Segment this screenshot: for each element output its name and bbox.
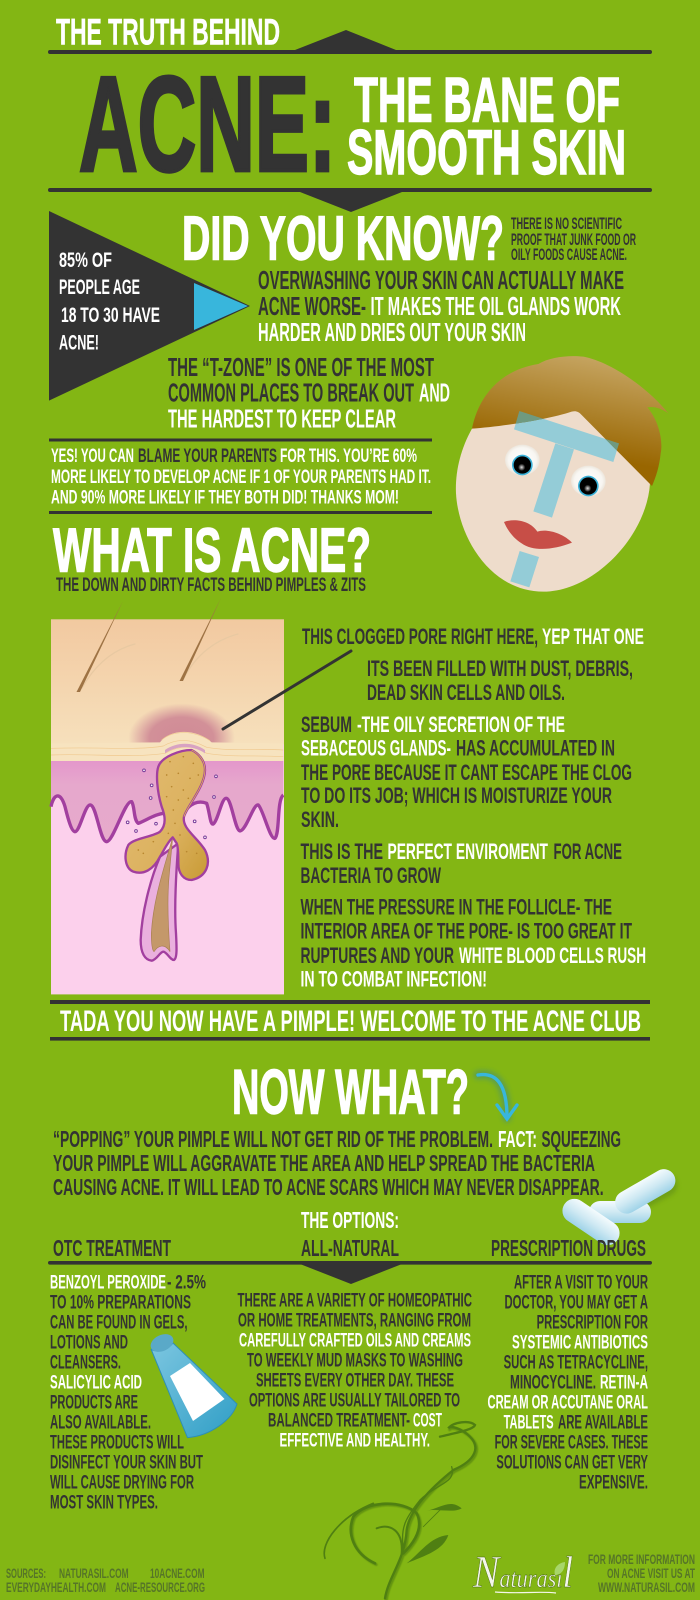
text block: otc treatment details: THESE PRODUCTS WILL bbox=[50, 1432, 184, 1454]
footer: sources: SOURCES: bbox=[6, 1565, 46, 1581]
text block: otc treatment details: BENZOYL PEROXIDE bbox=[50, 1272, 166, 1294]
text block: follicle pressure bbox=[300, 894, 646, 992]
text block: clogged pore: DEAD SKIN CELLS AND OILS. bbox=[367, 680, 565, 705]
text block: all-natural details: OPTIONS ARE USUALLY TAILORED TO bbox=[249, 1389, 460, 1411]
divider below parents text bbox=[49, 511, 432, 514]
icon: cleanser bottle bbox=[148, 1331, 237, 1438]
column headings bbox=[53, 1235, 646, 1261]
text block: blame your parents: BLAME YOUR PARENTS bbox=[138, 445, 277, 467]
text block: blame your parents: YES! YOU CAN bbox=[51, 445, 134, 467]
text block: blame your parents bbox=[51, 445, 431, 509]
panel: 85 percent triangle callout bbox=[49, 211, 250, 401]
options rule with downward triangle bbox=[48, 1261, 652, 1284]
icon: pills bbox=[558, 1165, 681, 1250]
text block: all-natural details: BALANCED TREATMENT- bbox=[268, 1409, 410, 1431]
text block: all-natural details: TO WEEKLY MUD MASKS TO WASHING bbox=[247, 1349, 463, 1371]
text block: prescription details: EXPENSIVE. bbox=[579, 1472, 648, 1494]
text block: t-zone: COMMON PLACES TO BREAK OUT bbox=[168, 378, 414, 408]
text block: prescription details: TABLETS bbox=[504, 1412, 554, 1434]
text block: clogged pore bbox=[302, 624, 644, 705]
text block: popping warning: FACT: bbox=[498, 1126, 537, 1152]
text block: t-zone: THE HARDEST TO KEEP CLEAR bbox=[168, 404, 396, 434]
text block: sebum: -THE OILY SECRETION OF THE bbox=[357, 712, 565, 737]
text block: otc treatment details: WILL CAUSE DRYING FOR bbox=[50, 1472, 194, 1494]
panel: 85 percent triangle callout: 18 TO 30 HAVE bbox=[61, 304, 160, 327]
text block: otc treatment details: PRODUCTS ARE bbox=[50, 1392, 138, 1414]
panel: 85 percent triangle callout: 85% OF bbox=[59, 249, 112, 272]
logo: naturasil: Naturasil bbox=[472, 1546, 573, 1597]
title kicker: the truth behind: THE TRUTH BEHIND bbox=[56, 11, 280, 53]
text block: popping warning: SQUEEZING bbox=[542, 1126, 621, 1152]
title: the bane of smooth skin bbox=[347, 66, 626, 188]
text block: otc treatment details: ALSO AVAILABLE. bbox=[50, 1412, 151, 1434]
text block: prescription details bbox=[488, 1272, 648, 1494]
text block: sebum: SEBACEOUS GLANDS- bbox=[301, 736, 451, 761]
text block: otc treatment details: MOST SKIN TYPES. bbox=[50, 1492, 158, 1514]
decorative vine bbox=[324, 1422, 477, 1600]
arrow: blue curved arrow bbox=[478, 1075, 517, 1119]
text block: all-natural details: COST bbox=[413, 1409, 442, 1431]
text block: popping warning bbox=[53, 1126, 621, 1200]
icon: cartoon face with t-zone bbox=[456, 356, 668, 592]
panel: 85 percent triangle callout: PEOPLE AGE bbox=[59, 276, 140, 299]
text block: otc treatment details: - 2.5% bbox=[167, 1272, 206, 1294]
text block: sebum: SKIN. bbox=[301, 807, 339, 832]
subheading: down and dirty facts: THE DOWN AND DIRTY FACTS BEHIND PIMPLES & ZITS bbox=[56, 575, 366, 596]
text block: perfect environment: FOR ACNE bbox=[554, 839, 622, 864]
divider above parents text bbox=[49, 438, 432, 442]
text block: clogged pore: THIS CLOGGED PORE RIGHT HERE, bbox=[302, 624, 538, 649]
panel: 85 percent triangle callout: ACNE! bbox=[59, 332, 99, 355]
text block: follicle pressure: IN TO COMBAT INFECTION! bbox=[300, 966, 487, 992]
text block: overwashing: ACNE WORSE- bbox=[258, 291, 366, 321]
column headings: OTC TREATMENT bbox=[53, 1235, 171, 1261]
text block: otc treatment details: SALICYLIC ACID bbox=[50, 1372, 142, 1394]
lower title rule with downward triangle bbox=[48, 188, 652, 212]
text block: prescription details: MINOCYCLINE. bbox=[510, 1372, 596, 1394]
text block: all-natural details: THERE ARE A VARIETY OF HOMEOPATHIC bbox=[238, 1289, 472, 1311]
text block: otc treatment details bbox=[50, 1272, 206, 1514]
text block: perfect environment: PERFECT ENVIROMENT bbox=[388, 839, 548, 864]
text block: perfect environment: BACTERIA TO GROW bbox=[300, 863, 441, 888]
text block: blame your parents: FOR THIS. YOU’RE 60% bbox=[280, 445, 417, 467]
text block: otc treatment details: TO 10% PREPARATIONS bbox=[50, 1292, 191, 1314]
text block: junk food fact bbox=[511, 214, 636, 264]
text block: all-natural details: EFFECTIVE AND HEALTHY. bbox=[280, 1429, 430, 1451]
text block: perfect environment bbox=[300, 839, 622, 888]
callout pointer line bbox=[223, 651, 351, 729]
text block: blame your parents: MORE LIKELY TO DEVELOP ACNE IF 1 OF YOUR PARENTS HAD IT. bbox=[51, 466, 431, 488]
text block: all-natural details bbox=[238, 1289, 472, 1451]
column headings: ALL-NATURAL bbox=[301, 1235, 399, 1261]
heading: did you know: DID YOU KNOW? bbox=[182, 204, 504, 273]
text block: otc treatment details: CAN BE FOUND IN GELS, bbox=[50, 1312, 188, 1334]
text block: t-zone: THE “T-ZONE” IS ONE OF THE MOST bbox=[168, 352, 434, 382]
footer: sources: 10ACNE.COM bbox=[150, 1565, 204, 1581]
text block: all-natural details: SHEETS EVERY OTHER DAY. THESE bbox=[256, 1369, 454, 1391]
footer: more information bbox=[588, 1551, 695, 1595]
text block: otc treatment details: CLEANSERS. bbox=[50, 1352, 121, 1374]
footer: sources: ACNE-RESOURCE.ORG bbox=[115, 1579, 205, 1595]
text block: overwashing bbox=[258, 265, 624, 347]
heading: the options: THE OPTIONS: bbox=[301, 1207, 399, 1233]
text block: sebum bbox=[301, 712, 632, 832]
text block: t-zone bbox=[168, 352, 450, 434]
heading: what is acne: WHAT IS ACNE? bbox=[53, 517, 371, 586]
heading: now what: NOW WHAT? bbox=[232, 1057, 469, 1127]
footer: sources: EVERYDAYHEALTH.COM bbox=[6, 1579, 106, 1595]
top rule with upward triangle bbox=[48, 30, 652, 54]
title: acne: ACNE: bbox=[79, 49, 336, 200]
text block: blame your parents: AND 90% MORE LIKELY IF THEY BOTH DID! THANKS MOM! bbox=[51, 487, 399, 509]
text block: prescription details: RETIN-A bbox=[600, 1372, 648, 1394]
footer: sources: NATURASIL.COM bbox=[59, 1565, 129, 1581]
footer: sources bbox=[6, 1565, 205, 1595]
text block: otc treatment details: DISINFECT YOUR SKIN BUT bbox=[50, 1452, 203, 1474]
text block: otc treatment details: LOTIONS AND bbox=[50, 1332, 128, 1354]
text block: t-zone: AND bbox=[419, 378, 450, 408]
text block: follicle pressure: RUPTURES AND YOUR bbox=[300, 943, 454, 968]
text block: perfect environment: THIS IS THE bbox=[300, 839, 383, 864]
text block: all-natural details: CAREFULLY CRAFTED OILS AND CREAMS bbox=[239, 1329, 471, 1351]
text block: all-natural details: OR HOME TREATMENTS, RANGING FROM bbox=[238, 1309, 471, 1331]
text block: sebum: SEBUM bbox=[301, 712, 352, 737]
panel: skin cross-section illustration bbox=[51, 598, 284, 994]
